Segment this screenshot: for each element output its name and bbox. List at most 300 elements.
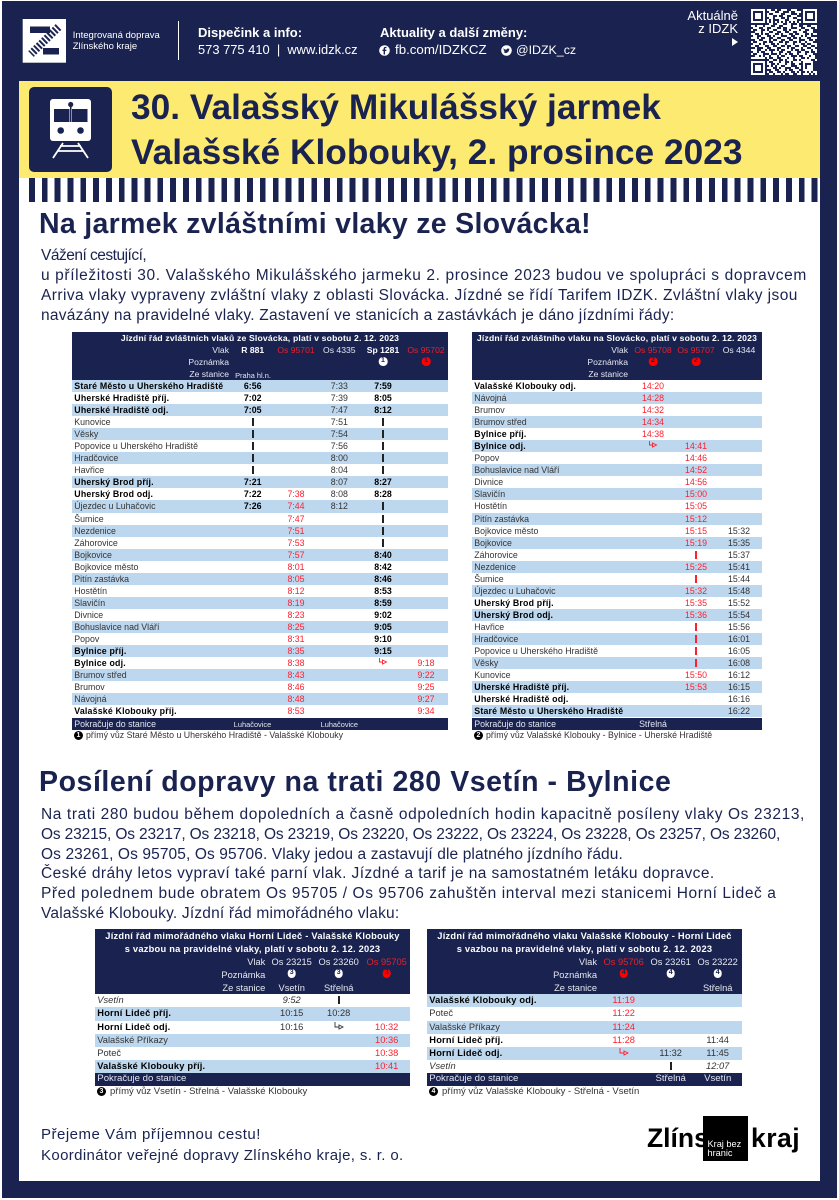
table rows: 10:41: [375, 1061, 398, 1071]
section 2 text: Os 23261, Os 95705, Os 95706. Vlaky jedou a zastavují dle platného jízdního řádu.: [41, 846, 623, 863]
table rows: Věsky: [474, 658, 498, 668]
intro text: navázány na pravidelné vlaky. Zastavení ve stanicích a zastávkách je dáno jízdními řády:: [41, 307, 674, 324]
table rows: Valašské Příkazy: [429, 1022, 500, 1032]
table rows: 7:33: [331, 381, 348, 391]
table rows: 8:08: [331, 489, 348, 499]
table header: Praha hl.n.: [235, 370, 271, 380]
table rows: Brumov: [74, 682, 105, 692]
table rows: 7:39: [331, 393, 348, 403]
footnote: přímý vůz Staré Město u Uherského Hradiště - Valašské Klobouky: [86, 730, 343, 740]
contact info: Dispečink a info:: [198, 25, 302, 40]
table header: s vazbou na pravidelné vlaky, platí v sobotu 2. 12. 2023: [457, 944, 712, 954]
table rows: 15:50: [685, 670, 707, 680]
table header: 1: [424, 357, 428, 364]
table rows: 7:51: [287, 526, 305, 536]
table rows: Popov: [474, 453, 499, 463]
QR prompt: Aktuálně: [687, 8, 738, 23]
table rows: Staré Město u Uherského Hradiště: [74, 381, 223, 391]
table header: 3: [385, 969, 389, 976]
QR prompt: [687, 8, 738, 46]
table rows: Návojná: [474, 393, 507, 403]
footnote: přímý vůz Valašské Klobouky - Střelná - Vsetín: [442, 1086, 639, 1097]
table rows: Věsky: [74, 429, 98, 439]
table rows: Vsetín: [97, 995, 124, 1005]
table rows: Divnice: [474, 477, 503, 487]
table rows: Bylnice odj.: [474, 441, 526, 451]
table rows: Brumov střed: [474, 417, 527, 427]
table rows: 10:36: [375, 1035, 398, 1045]
table header: Os 23215: [272, 957, 312, 967]
timetable: special train to Slovácko: [472, 332, 762, 740]
table rows: Vsetín: [429, 1061, 456, 1071]
title: [131, 88, 742, 172]
table header: Poznámka: [587, 357, 628, 367]
table rows: Hradčovice: [74, 453, 118, 463]
table rows: 9:25: [417, 682, 435, 692]
table rows: 11:44: [706, 1035, 729, 1045]
table rows: Havřice: [74, 465, 104, 475]
title: Valašské Klobouky, 2. prosince 2023: [131, 133, 742, 172]
table rows: Popovice u Uherského Hradiště: [474, 646, 598, 656]
table rows: Záhorovice: [474, 550, 518, 560]
table rows: Újezdec u Luhačovic: [474, 586, 555, 596]
table header: Sp 1281: [367, 345, 399, 355]
table rows: 7:38: [287, 489, 305, 499]
table rows: Uherský Brod odj.: [474, 610, 553, 620]
table rows: Šumice: [74, 514, 104, 524]
table header: Střelná: [324, 983, 353, 993]
table header: Vlak: [611, 345, 628, 355]
logo: Zlínský kraj: Zlíns: [647, 1123, 709, 1153]
table footer: [427, 1073, 742, 1086]
contact info: [198, 25, 358, 57]
table rows: 15:25: [685, 562, 707, 572]
table header: 4: [716, 969, 720, 976]
table rows: Bylnice odj.: [74, 658, 126, 668]
table rows: Pitín zastávka: [74, 574, 129, 584]
closing text: Přejeme Vám příjemnou cestu!: [41, 1126, 261, 1143]
table rows: 15:53: [685, 682, 707, 692]
table rows: Návojná: [74, 694, 107, 704]
table rows: 7:02: [244, 393, 261, 403]
table rows: 14:52: [685, 465, 707, 475]
table rows: 8:12: [374, 405, 392, 415]
table header: Os 95705: [367, 957, 407, 967]
table rows: 14:46: [685, 453, 707, 463]
social links: Aktuality a další změny:: [380, 25, 527, 40]
heading: section 2: Posílení dopravy na trati 280 Vsetín - Bylnice: [39, 766, 671, 798]
table header: Os 23260: [319, 957, 359, 967]
table header: Os 95708: [634, 345, 672, 355]
table rows: 7:47: [287, 514, 305, 524]
timetable: Horní Lideč to Valašské Klobouky: [95, 929, 410, 1097]
table rows: 11:28: [612, 1035, 635, 1045]
table rows: 15:15: [685, 526, 707, 536]
table rows: 8:48: [287, 694, 305, 704]
table footer: Střelná: [655, 1073, 686, 1084]
table header: Os 95706: [604, 957, 644, 967]
black square: hranic: [708, 1148, 733, 1158]
intro text: Vážení cestující,: [41, 247, 146, 264]
table header: [472, 332, 762, 380]
intro text: Arriva vlaky vypraveny zvláštní vlaky z oblasti Slovácka. Jízdné se řídí Tarifem IDZK. Zvláštní vlaky jsou: [41, 287, 798, 304]
table rows: 15:05: [685, 501, 707, 511]
table rows: 14:32: [642, 405, 664, 415]
table rows: 8:53: [287, 706, 305, 716]
table header: Vlak: [212, 345, 229, 355]
table rows: 14:41: [685, 441, 707, 451]
table rows: 15:44: [728, 574, 750, 584]
table rows: [95, 995, 410, 1073]
table header: Vsetín: [279, 983, 305, 993]
closing text: [41, 1126, 404, 1164]
table rows: Valašské Klobouky odj.: [474, 381, 576, 391]
table rows: 8:40: [374, 550, 392, 560]
table rows: Záhorovice: [74, 538, 118, 548]
footnote: přímý vůz Vsetín - Střelná - Valašské Klobouky: [110, 1086, 307, 1097]
table rows: 14:38: [642, 429, 664, 439]
table rows: 8:12: [331, 501, 348, 511]
table rows: Poteč: [97, 1048, 121, 1058]
table rows: 15:35: [685, 598, 707, 608]
social links: [379, 25, 576, 57]
social links: fb.com/IDZKCZ: [395, 42, 487, 57]
table rows: 15:32: [728, 526, 750, 536]
icon: twitter: [501, 45, 512, 56]
table rows: Újezdec u Luhačovic: [74, 501, 155, 511]
table rows: 16:16: [728, 694, 750, 704]
table rows: 15:37: [728, 550, 750, 560]
table rows: Uherské Hradiště příj.: [74, 393, 169, 403]
table rows: Horní Lideč odj.: [429, 1048, 502, 1058]
table rows: 8:38: [287, 658, 305, 668]
table rows: 14:28: [642, 393, 664, 403]
table rows: Nezdenice: [74, 526, 116, 536]
header logo: IDZK: [22, 19, 160, 63]
QR code: [751, 9, 817, 75]
table rows: 11:45: [706, 1048, 729, 1058]
table rows: 8:43: [287, 670, 305, 680]
table rows: 7:26: [244, 501, 261, 511]
table rows: 7:21: [244, 477, 261, 487]
table rows: 8:31: [287, 634, 305, 644]
table rows: 8:59: [374, 598, 392, 608]
table header: Ze stanice: [222, 983, 265, 993]
table rows: 9:34: [417, 706, 435, 716]
table footer: [472, 718, 762, 730]
footnote: 2: [477, 732, 480, 739]
table rows: Slavičín: [74, 598, 105, 608]
table rows: 7:56: [331, 441, 348, 451]
table rows: Uherský Brod odj.: [74, 489, 153, 499]
table rows: Nezdenice: [474, 562, 516, 572]
table rows: Kunovice: [74, 417, 110, 427]
table rows: Uherský Brod příj.: [74, 477, 154, 487]
table header: [427, 929, 742, 994]
table rows: 8:28: [374, 489, 392, 499]
table rows: 11:19: [612, 995, 635, 1005]
table header: Poznámka: [553, 970, 597, 980]
table header: s vazbou na pravidelné vlaky, platí v sobotu 2. 12. 2023: [125, 944, 380, 954]
table rows: 10:38: [375, 1048, 398, 1058]
table header: Poznámka: [188, 357, 229, 367]
table rows: Uherský Brod příj.: [474, 598, 554, 608]
table rows: 7:22: [244, 489, 261, 499]
table header: Střelná: [703, 983, 732, 993]
table rows: Brumov střed: [74, 670, 127, 680]
section 2 text: Před polednem bude obratem Os 95705 / Os 95706 zahuštěn interval mezi stanicemi Horní Lideč a: [41, 885, 776, 902]
table header: Jízdní řád zvláštních vlaků ze Slovácka, platí v sobotu 2. 12. 2023: [121, 333, 399, 343]
table rows: 8:19: [287, 598, 305, 608]
table rows: Slavičín: [474, 489, 505, 499]
timetable: special trains from Slovácko: [72, 332, 448, 740]
table header: 4: [669, 969, 673, 976]
table rows: Bohuslavice nad Vláří: [474, 465, 559, 475]
table header: Os 23222: [698, 957, 738, 967]
table header: Os 4335: [323, 345, 356, 355]
logo text: Zlínského kraje: [73, 41, 137, 52]
table rows: Havřice: [474, 622, 504, 632]
table rows: 15:19: [685, 538, 707, 548]
table rows: 7:47: [331, 405, 348, 415]
table rows: 15:54: [728, 610, 750, 620]
logo text: Integrovaná doprava: [73, 30, 160, 41]
table header: Vlak: [247, 957, 265, 967]
table header: Ze stanice: [554, 983, 597, 993]
table rows: 11:32: [659, 1048, 682, 1058]
table rows: 9:22: [417, 670, 435, 680]
table rows: 8:53: [374, 586, 392, 596]
icon: IDZK Z mark: [22, 19, 66, 63]
table rows: 15:48: [728, 586, 750, 596]
table rows: Bojkovice: [74, 550, 112, 560]
table rows: 15:12: [685, 514, 707, 524]
table rows: 16:01: [728, 634, 750, 644]
table header: 1: [381, 357, 385, 364]
table rows: 8:35: [287, 646, 305, 656]
table header: [95, 929, 410, 994]
section 2 text: Na trati 280 budou během dopoledních a časně odpoledních hodin kapacitně posíleny vlaky Os 23213,: [41, 806, 805, 823]
table footer: Pokračuje do stanice: [474, 719, 556, 729]
table rows: 15:36: [685, 610, 707, 620]
section 2 text: České dráhy letos vypraví také parní vlak. Jízdné a tarif je na samostatném letáku dopravce.: [41, 865, 715, 882]
table rows: Brumov: [474, 405, 505, 415]
table rows: Horní Lideč příj.: [97, 1008, 171, 1018]
table rows: 7:53: [287, 538, 305, 548]
table header: 2: [694, 357, 698, 364]
table rows: 9:05: [374, 622, 392, 632]
table rows: 15:41: [728, 562, 750, 572]
table header: 3: [337, 969, 341, 976]
table footer: [72, 718, 448, 730]
table rows: 8:12: [287, 586, 305, 596]
table header: Ze stanice: [189, 369, 229, 379]
table rows: 8:46: [374, 574, 392, 584]
icon: train: [29, 87, 112, 172]
table header: Vlak: [579, 957, 597, 967]
table rows: Uherské Hradiště odj.: [474, 694, 569, 704]
table rows: 15:00: [685, 489, 707, 499]
table rows: 6:56: [244, 381, 261, 391]
table rows: 16:22: [728, 706, 750, 716]
table rows: Bojkovice město: [474, 526, 538, 536]
table rows: Šumice: [474, 574, 504, 584]
timetable: Valašské Klobouky to Horní Lideč: [427, 929, 742, 1097]
table header: 3: [290, 969, 294, 976]
closing text: Koordinátor veřejné dopravy Zlínského kraje, s. r. o.: [41, 1147, 404, 1164]
table rows: 7:05: [244, 405, 261, 415]
logo: Zlínský kraj: kraj: [751, 1123, 800, 1153]
table rows: 7:59: [374, 381, 392, 391]
table rows: Kunovice: [474, 670, 510, 680]
table rows: 11:24: [612, 1022, 635, 1032]
table header: Os 95707: [677, 345, 715, 355]
table rows: Valašské Příkazy: [97, 1035, 168, 1045]
table rows: 7:44: [287, 501, 305, 511]
table rows: 8:00: [331, 453, 348, 463]
table footer: Střelná: [639, 719, 667, 729]
icon: facebook: [379, 45, 390, 56]
table rows: 8:46: [287, 682, 305, 692]
title: 30. Valašský Mikulášský jarmek: [131, 88, 661, 127]
table rows: Staré Město u Uherského Hradiště: [474, 706, 623, 716]
table rows: Bojkovice: [474, 538, 512, 548]
black square: Kraj bez: [708, 1139, 741, 1149]
table rows: 8:04: [331, 465, 348, 475]
table rows: 16:08: [728, 658, 750, 668]
table footer: Luhačovice: [234, 720, 271, 729]
table footer: Pokračuje do stanice: [429, 1073, 518, 1084]
table rows: 16:05: [728, 646, 750, 656]
table rows: 8:27: [374, 477, 392, 487]
table rows: 10:15: [280, 1008, 303, 1018]
table rows: 15:35: [728, 538, 750, 548]
table header: Os 23261: [651, 957, 691, 967]
table rows: Bylnice příj.: [74, 646, 127, 656]
table header: Os 4344: [723, 345, 755, 355]
footnote: 3: [100, 1088, 103, 1094]
heading: section 1: Na jarmek zvláštními vlaky ze Slovácka!: [39, 208, 591, 240]
table rows: 14:56: [685, 477, 707, 487]
footnote: 4: [432, 1088, 435, 1094]
table rows: 7:57: [287, 550, 305, 560]
footnote: 1: [77, 732, 80, 739]
section 2 text: Valašské Klobouky. Jízdní řád mimořádného vlaku:: [41, 905, 399, 922]
table header: Jízdní řád mimořádného vlaku Valašské Klobouky - Horní Lideč: [437, 931, 732, 941]
table rows: 7:51: [331, 417, 348, 427]
table rows: 15:52: [728, 598, 750, 608]
table header: R 881: [241, 345, 264, 355]
table rows: 8:23: [287, 610, 305, 620]
table rows: Divnice: [74, 610, 103, 620]
table rows: 11:22: [612, 1008, 635, 1018]
table rows: 10:16: [280, 1022, 303, 1032]
table header: 4: [622, 969, 626, 976]
table rows: 9:52: [283, 995, 301, 1005]
logo: Zlínský kraj: [647, 1116, 800, 1161]
table rows: 8:05: [374, 393, 392, 403]
table rows: 14:34: [642, 417, 664, 427]
table rows: 8:05: [287, 574, 305, 584]
table header: Ze stanice: [588, 369, 628, 379]
table rows: Popovice u Uherského Hradiště: [74, 441, 198, 451]
table rows: 15:56: [728, 622, 750, 632]
table rows: Uherské Hradiště příj.: [474, 682, 569, 692]
intro text: [41, 247, 807, 324]
table footer: [95, 1073, 410, 1086]
table rows: [427, 994, 742, 1071]
social links: @IDZK_cz: [516, 43, 576, 57]
table rows: [472, 381, 762, 717]
table rows: Pitín zastávka: [474, 514, 529, 524]
table rows: [72, 380, 448, 716]
table header: [72, 332, 448, 380]
table rows: Bohuslavice nad Vláří: [74, 622, 159, 632]
table rows: 15:32: [685, 586, 707, 596]
table rows: 8:25: [287, 622, 305, 632]
table rows: 9:02: [374, 610, 392, 620]
table header: Jízdní řád mimořádného vlaku Horní Lideč - Valašské Klobouky: [105, 931, 400, 941]
table header: Os 95702: [407, 345, 445, 355]
table rows: 9:27: [417, 694, 435, 704]
logo text: [73, 30, 160, 52]
table header: 2: [651, 357, 655, 364]
table rows: Horní Lideč odj.: [97, 1022, 170, 1032]
table footer: Luhačovice: [321, 720, 358, 729]
table rows: 16:15: [728, 682, 750, 692]
table rows: 8:42: [374, 562, 392, 572]
QR prompt: z IDZK: [698, 21, 738, 36]
black square: [703, 1116, 748, 1161]
table rows: Bojkovice město: [74, 562, 138, 572]
table header: Jízdní řád zvláštního vlaku na Slovácko, platí v sobotu 2. 12. 2023: [477, 333, 757, 343]
footnote: přímý vůz Valašské Klobouky - Bylnice - Uherské Hradiště: [486, 730, 712, 740]
section 2 text: Os 23215, Os 23217, Os 23218, Os 23219, Os 23220, Os 23222, Os 23224, Os 23228, Os 23257, Os 23260,: [41, 826, 780, 843]
table rows: 14:20: [642, 381, 664, 391]
table header: Poznámka: [221, 970, 265, 980]
table rows: Valašské Klobouky příj.: [74, 706, 177, 716]
table rows: Hostětín: [474, 501, 507, 511]
intro text: u příležitosti 30. Valašského Mikulášského jarmeku 2. prosince 2023 budou ve spolupráci s dopravcem: [41, 267, 807, 284]
table rows: 12:07: [706, 1061, 729, 1071]
table rows: 10:32: [375, 1022, 398, 1032]
table rows: Hradčovice: [474, 634, 518, 644]
contact info: 573 775 410 | www.idzk.cz: [198, 42, 358, 57]
table rows: Hostětín: [74, 586, 107, 596]
title banner: [19, 81, 820, 178]
table rows: 9:18: [417, 658, 435, 668]
table rows: Uherské Hradiště odj.: [74, 405, 169, 415]
table rows: Valašské Klobouky příj.: [97, 1061, 205, 1071]
table rows: 10:28: [327, 1008, 350, 1018]
table rows: 8:01: [287, 562, 305, 572]
icon: play arrow: [732, 38, 738, 46]
table rows: 9:10: [374, 634, 392, 644]
table footer: Pokračuje do stanice: [74, 719, 156, 729]
table footer: Vsetín: [704, 1073, 731, 1084]
table rows: Valašské Klobouky odj.: [429, 995, 537, 1005]
table rows: Poteč: [429, 1008, 453, 1018]
table header: Os 95701: [277, 345, 315, 355]
section 2 text: [41, 806, 805, 922]
table rows: 9:15: [374, 646, 392, 656]
table rows: Bylnice příj.: [474, 429, 527, 439]
table rows: 7:54: [331, 429, 348, 439]
table rows: Popov: [74, 634, 99, 644]
table footer: Pokračuje do stanice: [97, 1073, 186, 1084]
table rows: 8:07: [331, 477, 348, 487]
table rows: Horní Lideč příj.: [429, 1035, 503, 1045]
